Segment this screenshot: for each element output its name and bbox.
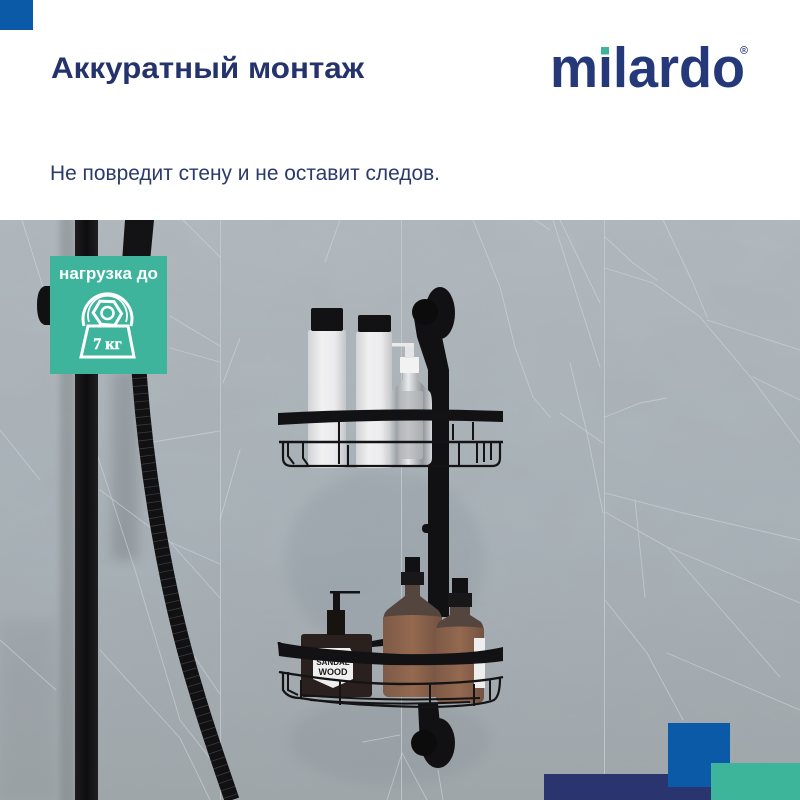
load badge: [50, 256, 167, 374]
upper white bottles: [308, 308, 392, 468]
wall shadow near rail: [60, 210, 75, 800]
lower wall mount: [411, 704, 455, 768]
pole hook: [422, 524, 448, 533]
lower dark soap dispenser: [301, 591, 372, 697]
glass pump bottle: [389, 343, 432, 465]
badge caption: нагрузка до: [59, 265, 158, 283]
title: Аккуратный монтаж: [51, 52, 365, 85]
corner brand blocks: [544, 723, 800, 800]
panel seams: [220, 220, 604, 800]
upper wall mount and pole: [412, 287, 455, 617]
logo: milardo: milardo: [550, 36, 745, 100]
soap label: WOOD: [318, 667, 348, 677]
soap label: [313, 648, 353, 688]
marble veins: [0, 220, 800, 800]
header background: [0, 0, 800, 220]
icon: weight with nut: 7 кг: [93, 336, 122, 353]
shower rail: [75, 220, 98, 800]
lower brown bottles: [383, 557, 485, 703]
corner accent square: [0, 0, 33, 30]
soap label: SANDAL: [316, 658, 350, 667]
lower basket: [278, 639, 503, 707]
shower hose and handle: [122, 220, 232, 800]
shelf unit: [278, 287, 503, 768]
subtitle: Не повредит стену и не оставит следов.: [50, 162, 440, 185]
rail wall bracket: [37, 286, 50, 325]
marble wall photo: [0, 210, 800, 800]
logo: milardo: R: [742, 48, 746, 54]
upper basket: [278, 409, 503, 466]
